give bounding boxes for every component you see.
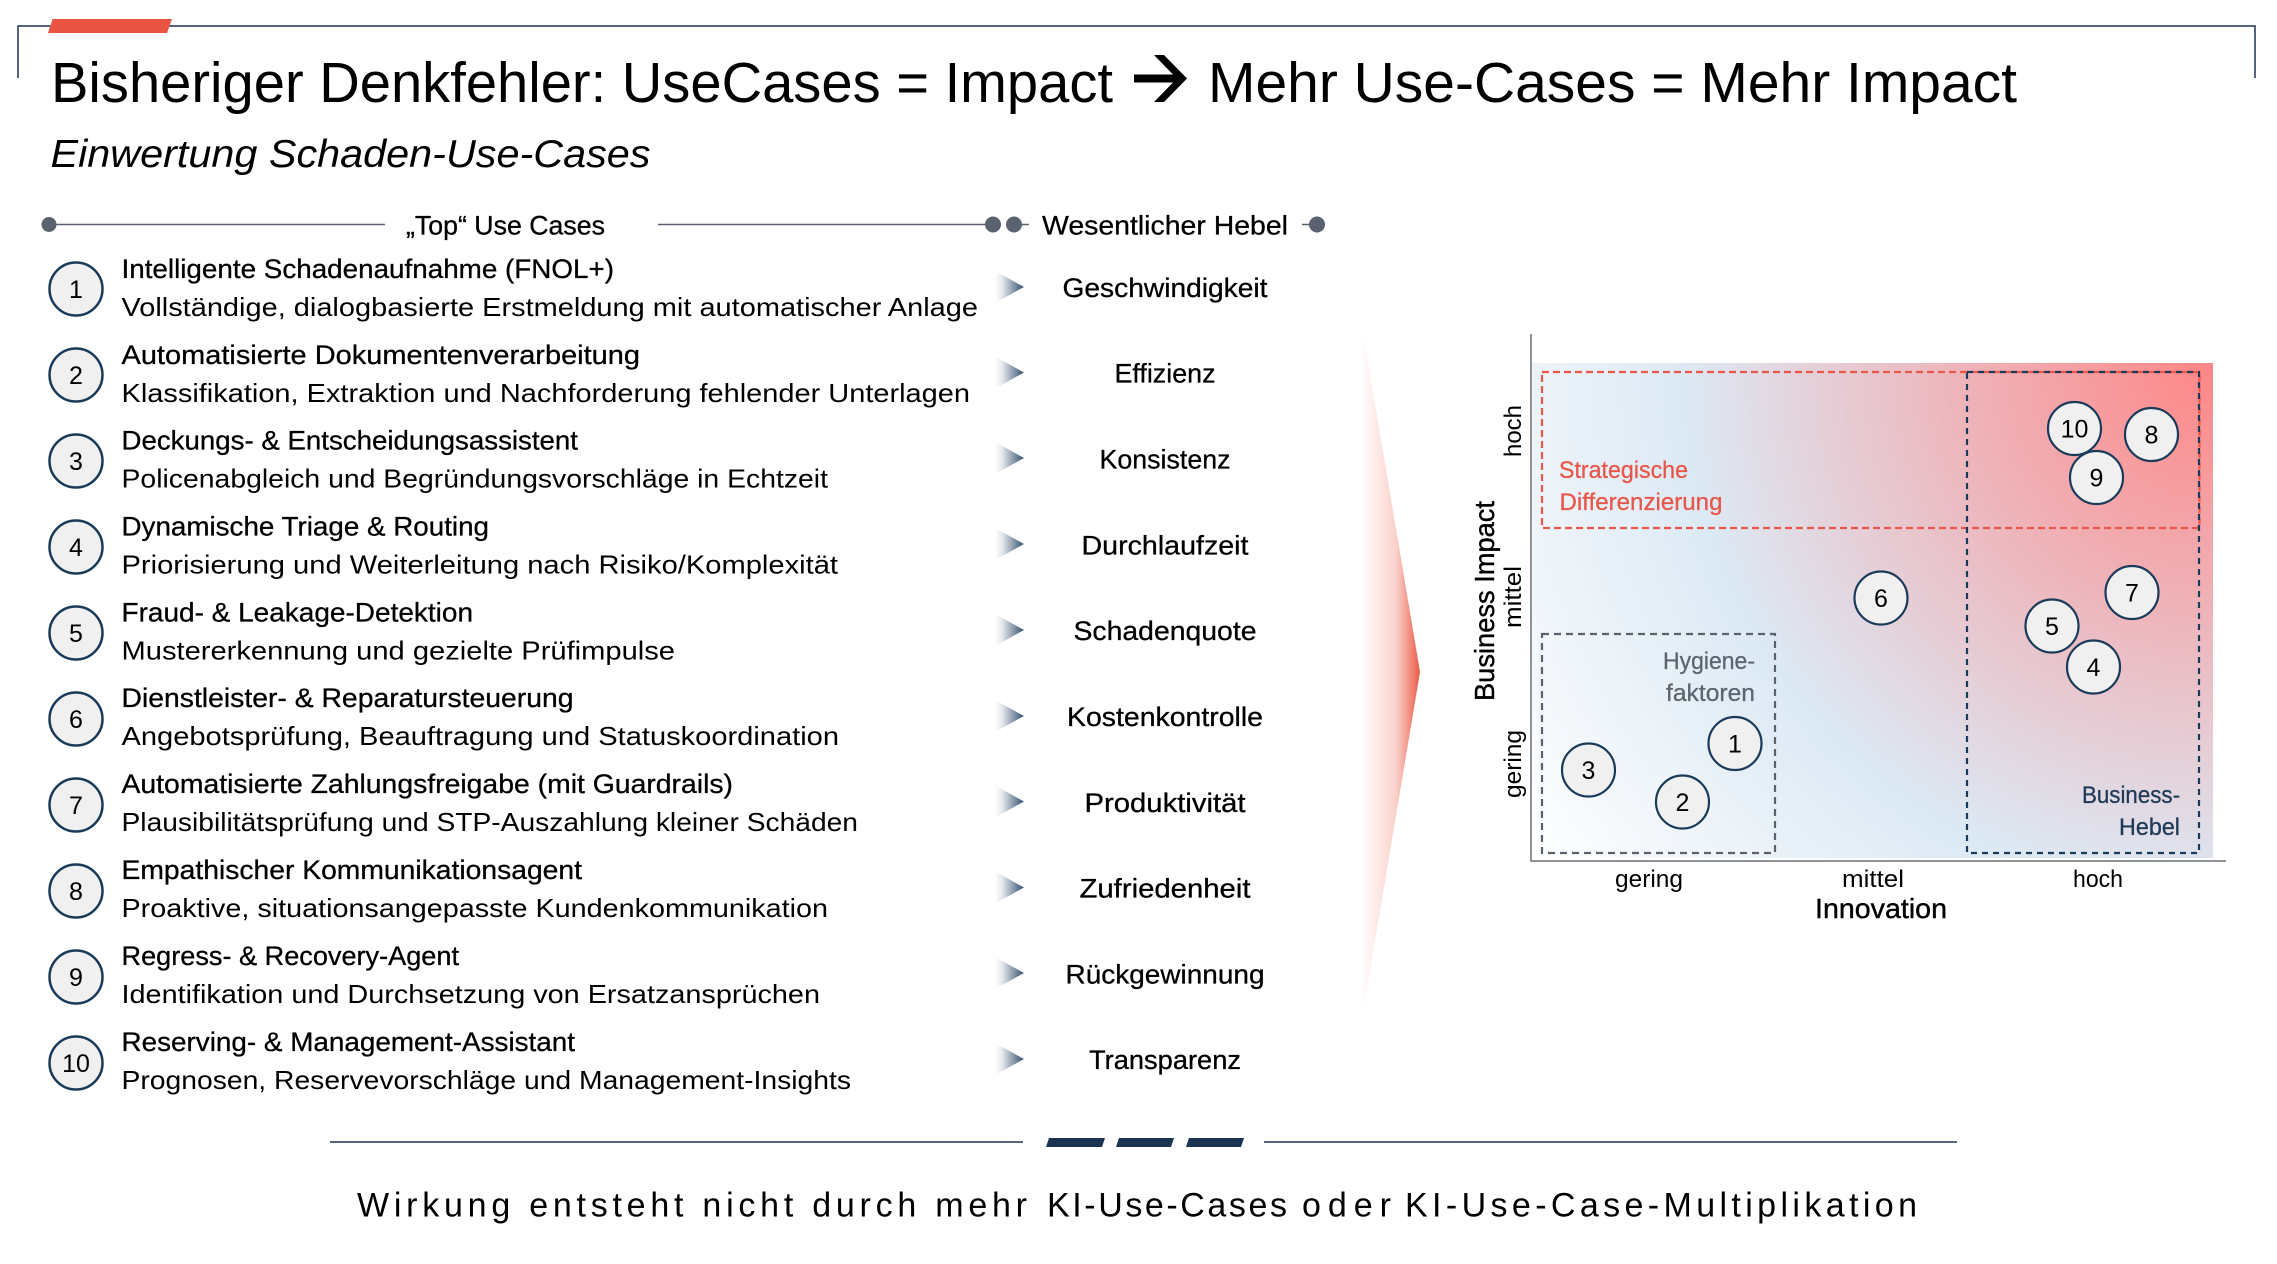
x axis labels [1615,866,2123,893]
use case 2: Klassifikation, Extraktion und Nachforderung fehlender Unterlagen [122,378,970,408]
use case 10: Prognosen, Reservevorschläge und Management-Insights [122,1065,851,1095]
y axis labels: gering [1500,730,1527,798]
bubble numbers: 2 [1676,789,1689,817]
use case 10: Reserving- & Management-Assistant [122,1027,576,1057]
x axis labels: mittel [1842,866,1904,893]
large gradient arrow [1361,320,1420,1025]
zone: Business-Hebel [1967,372,2199,853]
bubble numbers [1582,416,2158,817]
use case 6: 6 [69,706,83,734]
lever labels: Rückgewinnung [1066,960,1264,990]
bubble numbers: 10 [2061,416,2088,444]
use case 10 [50,1027,851,1095]
column header: Top Use Cases: „Top“ Use Cases [406,210,605,240]
bubble numbers: 8 [2145,422,2158,450]
bubbles [1562,402,2178,828]
y axis labels [1500,405,1527,798]
use case 4: Priorisierung und Weiterleitung nach Risiko/Komplexität [122,550,839,580]
use case 2: 2 [69,362,83,390]
header frame [18,26,2255,78]
x axis labels: gering [1615,866,1683,893]
lever labels: Kostenkontrolle [1067,702,1263,732]
title: Mehr Use-Cases = Mehr Impact [1208,51,2017,115]
use case 7: Automatisierte Zahlungsfreigabe (mit Guardrails) [122,769,733,799]
title [51,51,2017,115]
use case 9: Regress- & Recovery-Agent [122,941,459,971]
use case 3 [50,426,829,494]
bubble numbers: 9 [2090,464,2103,492]
bottom statement: oder [1302,1186,1391,1224]
zone: Strategische Differenzierung: Strategische [1559,457,1688,484]
bottom divider [330,1138,1957,1147]
lever labels: Transparenz [1089,1045,1241,1075]
lever labels: Effizienz [1114,358,1216,388]
subtitle: Einwertung Schaden-Use-Cases [50,133,650,176]
bottom statement: Wirkung entsteht nicht durch mehr [357,1186,1027,1224]
bubble numbers: 1 [1728,730,1742,758]
bottom statement: KI-Use-Case-Multiplikation [1405,1186,1917,1224]
lever labels: Schadenquote [1074,616,1256,646]
use case 9 [50,941,820,1009]
use case 1: Vollständige, dialogbasierte Erstmeldung mit automatischer Anlage [122,292,978,322]
use case 1: Intelligente Schadenaufnahme (FNOL+) [122,254,614,284]
bubble numbers: 7 [2125,580,2139,608]
y axis labels: hoch [1500,405,1527,457]
use case 4 [50,512,839,580]
use case 1: 1 [69,276,83,304]
lever labels: Konsistenz [1100,444,1230,474]
use case 2: Automatisierte Dokumentenverarbeitung [122,340,640,370]
y axis labels: mittel [1500,566,1527,628]
bubble numbers: 5 [2045,613,2059,641]
use case 8: 8 [69,878,83,906]
use case 2 [50,340,970,408]
zone: Hygienefaktoren [1542,634,1775,853]
use case 3: 3 [69,448,83,476]
use case 6: Angebotsprüfung, Beauftragung und Statuskoordination [122,721,839,751]
use case 3: Policenabgleich und Begründungsvorschläge in Echtzeit [122,464,829,494]
use case 5: Mustererkennung und gezielte Prüfimpulse [122,636,675,666]
column header: Wesentlicher Hebel: Wesentlicher Hebel [1042,210,1288,240]
lever labels: Durchlaufzeit [1082,530,1249,560]
bottom statement: KI-Use-Cases [1047,1186,1287,1224]
icon: title arrow [1134,55,1187,102]
use case 5: 5 [69,620,83,648]
zone: Strategische Differenzierung: Differenzierung [1560,489,1722,516]
use case 9: Identifikation und Durchsetzung von Ersatzansprüchen [122,979,820,1009]
use case 7: Plausibilitätsprüfung und STP-Auszahlung kleiner Schäden [122,807,858,837]
use case 6: Dienstleister- & Reparatursteuerung [122,683,574,713]
matrix background [1532,363,2213,858]
title: Bisheriger Denkfehler: UseCases = Impact [51,51,1113,115]
lever labels: Zufriedenheit [1080,874,1251,904]
bubble numbers: 3 [1582,757,1595,785]
y axis title: Business Impact [1469,501,1500,701]
use case 6 [50,683,839,751]
column header: Top Use Cases [42,210,1001,240]
use case 8: Empathischer Kommunikationsagent [122,855,583,885]
lever arrows [995,271,1024,1075]
use case 7: 7 [69,792,83,820]
lever labels: Produktivität [1084,788,1246,818]
lever labels: Geschwindigkeit [1062,273,1268,303]
use case 8 [50,855,828,923]
use case 7 [50,769,858,837]
zone: Hygienefaktoren: faktoren [1666,680,1755,707]
axes [1531,334,2226,861]
use case 1 [50,254,978,322]
bottom statement [357,1186,1917,1224]
use case 4: Dynamische Triage & Routing [122,512,489,542]
use case 5 [50,598,675,666]
x axis labels: hoch [2073,866,2123,893]
matrix chart [1469,334,2226,924]
zone: Business-Hebel: Business- [2082,782,2180,809]
red accent tab [48,19,172,33]
use case 5: Fraud- & Leakage-Detektion [122,598,473,628]
lever labels [1062,273,1268,1075]
zone: Strategische Differenzierung [1542,372,2200,528]
use case 8: Proaktive, situationsangepasste Kundenkommunikation [122,893,828,923]
use case 4: 4 [69,534,83,562]
zone: Hygienefaktoren: Hygiene- [1663,648,1755,675]
x axis title: Innovation [1815,893,1947,924]
zone: Business-Hebel: Hebel [2119,814,2180,841]
use case 9: 9 [69,964,83,992]
use case 10: 10 [62,1050,90,1078]
use case 3: Deckungs- & Entscheidungsassistent [122,426,578,456]
bubble numbers: 4 [2087,654,2101,682]
bubble numbers: 6 [1874,585,1888,613]
